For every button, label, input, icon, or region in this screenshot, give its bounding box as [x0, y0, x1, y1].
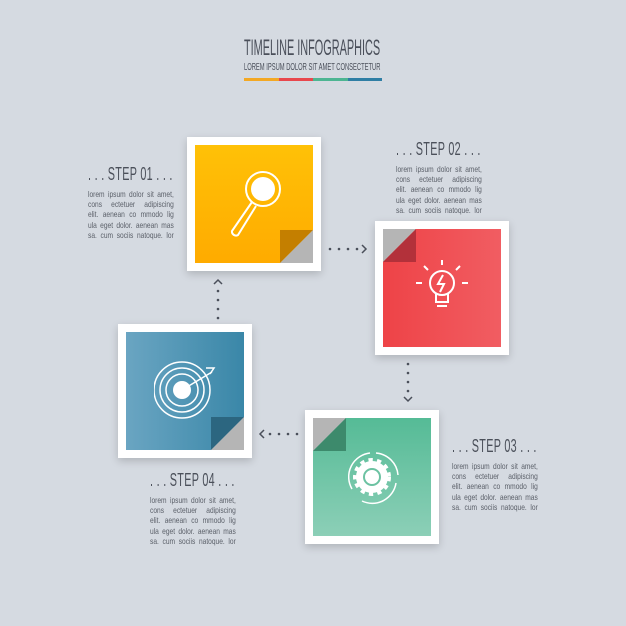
card: step 04 blue	[118, 324, 252, 458]
icon: magnifier	[230, 171, 281, 237]
card: step 02 red	[375, 221, 509, 355]
text: step 02: lorem ipsum dolor sit amet,	[396, 164, 482, 174]
text: step 02	[396, 139, 482, 215]
title: LOREM IPSUM DOLOR SIT AMET CONSECTETUR	[244, 62, 380, 73]
title: TIMELINE INFOGRAPHICS	[244, 35, 380, 60]
text: step 02: sa. cum sociis natoque. lor	[396, 205, 482, 215]
fold corner	[280, 230, 313, 263]
text: step 01: sa. cum sociis natoque. lor	[88, 230, 174, 240]
text: step 02: ula eget dolor. aenean mas	[396, 195, 482, 205]
fold corner	[313, 418, 346, 451]
text: step 04: ula eget dolor. aenean mas	[150, 526, 236, 536]
title	[244, 35, 382, 81]
text: step 01: lorem ipsum dolor sit amet,	[88, 189, 174, 199]
arrow: 2 to 3	[404, 362, 412, 402]
text: step 02: elit. aenean co mmodo lig	[396, 184, 482, 194]
text: step 01	[88, 164, 174, 240]
text: step 04: sa. cum sociis natoque. lor	[150, 536, 236, 546]
text: step 03: . . . STEP 03 . . .	[452, 436, 537, 456]
text: step 03	[452, 436, 538, 512]
text: step 04	[150, 470, 236, 546]
text: step 02: cons ectetuer adipiscing	[396, 174, 482, 184]
text: step 03: sa. cum sociis natoque. lor	[452, 502, 538, 512]
icon: light bulb	[416, 260, 468, 307]
card: step 03 green	[305, 410, 439, 544]
fold corner	[383, 229, 416, 262]
text: step 03: lorem ipsum dolor sit amet,	[452, 461, 538, 471]
arrow: 4 to 1	[214, 279, 222, 320]
arrow: 1 to 2	[328, 244, 367, 254]
text: step 03: ula eget dolor. aenean mas	[452, 492, 538, 502]
text: step 01: . . . STEP 01 . . .	[88, 164, 173, 184]
fold corner	[211, 417, 244, 450]
text: step 01: ula eget dolor. aenean mas	[88, 220, 174, 230]
text: step 01: elit. aenean co mmodo lig	[88, 209, 174, 219]
text: step 01: cons ectetuer adipiscing	[88, 199, 174, 209]
text: step 03: elit. aenean co mmodo lig	[452, 481, 538, 491]
text: step 02: . . . STEP 02 . . .	[396, 139, 481, 159]
arrow: 3 to 4	[259, 430, 298, 438]
text: step 04: lorem ipsum dolor sit amet,	[150, 495, 236, 505]
icon: gear cycle	[348, 452, 399, 504]
text: step 04: . . . STEP 04 . . .	[150, 470, 235, 490]
icon: target	[154, 361, 216, 419]
text: step 03: cons ectetuer adipiscing	[452, 471, 538, 481]
text: step 04: elit. aenean co mmodo lig	[150, 515, 236, 525]
card: step 01 yellow	[187, 137, 321, 271]
text: step 04: cons ectetuer adipiscing	[150, 505, 236, 515]
